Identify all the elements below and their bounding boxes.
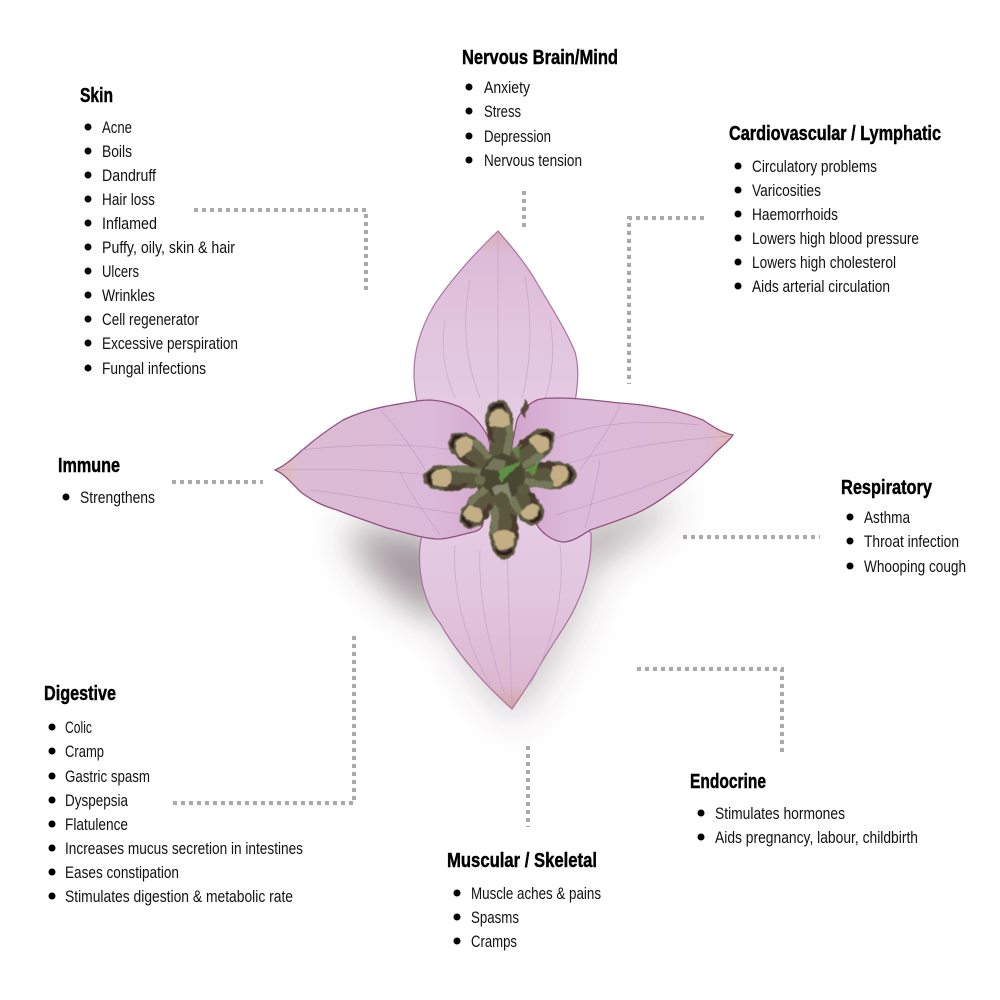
flower shadow [345,495,680,722]
heading: cardiovascular: Cardiovascular / Lymphatic [729,123,941,145]
list: respiratory [846,509,966,576]
flower centre stamens [422,399,577,560]
list: skin [84,119,238,378]
panel: nervous [462,47,618,170]
list: muscular: Cramps [471,933,517,951]
connector: cardiovascular [629,218,704,384]
connector: immune [172,480,263,484]
list: digestive: Dyspepsia [65,792,129,810]
list: cardiovascular: Circulatory problems [752,158,877,176]
list: skin: Dandruff [102,167,156,185]
list: nervous: Stress [484,103,521,121]
connector: endocrine [637,669,782,752]
list: endocrine: Stimulates hormones [715,805,845,823]
list: cardiovascular: Aids arterial circulation [752,278,890,296]
heading: nervous: Nervous Brain/Mind [462,47,618,69]
bottom petal [419,470,591,709]
list: digestive: Increases mucus secretion in intestines [65,840,303,858]
list: skin: Boils [102,143,132,161]
list: endocrine: Aids pregnancy, labour, childbirth [715,829,918,847]
list: respiratory: Asthma [864,509,911,527]
list: immune: Strengthens [80,489,155,507]
list: nervous [466,79,582,170]
heading: skin: Skin [80,85,113,107]
list: skin: Wrinkles [102,287,155,305]
panel: muscular [447,850,601,951]
flower illustration [275,231,733,722]
list: digestive: Gastric spasm [65,768,150,786]
connector: skin [194,210,366,293]
top petal [414,231,578,470]
panel: skin [80,85,238,378]
panel: endocrine [690,771,918,847]
list: cardiovascular: Lowers high blood pressure [752,230,919,248]
list: endocrine [698,805,918,847]
list: digestive: Eases constipation [65,864,179,882]
list: muscular [454,885,601,951]
list: digestive: Flatulence [65,816,128,834]
list: nervous: Nervous tension [484,152,582,170]
list: skin: Puffy, oily, skin & hair [102,239,235,257]
list: muscular: Spasms [471,909,519,927]
list: cardiovascular: Haemorrhoids [752,206,838,224]
connector: respiratory [683,535,820,539]
list: digestive: Cramp [65,743,104,761]
list: cardiovascular [734,158,919,296]
connector: digestive [173,634,354,803]
panel: cardiovascular [729,123,941,296]
heading: digestive: Digestive [44,683,116,705]
list: skin: Hair loss [102,191,155,209]
heading: respiratory: Respiratory [841,477,933,499]
list: skin: Cell regenerator [102,311,199,329]
list: respiratory: Whooping cough [864,558,966,576]
list: skin: Inflamed [102,215,157,233]
list: skin: Excessive perspiration [102,335,238,353]
list: digestive: Stimulates digestion & metabolic rate [65,888,293,906]
panel: immune [58,455,155,507]
list: cardiovascular: Varicosities [752,182,821,200]
list: nervous: Anxiety [484,79,531,97]
list: cardiovascular: Lowers high cholesterol [752,254,896,272]
panel: respiratory [841,477,966,576]
list: digestive: Colic [65,719,92,737]
list: skin: Acne [102,119,132,137]
heading: endocrine: Endocrine [690,771,766,793]
list: nervous: Depression [484,128,551,146]
left petal [275,400,500,539]
list: skin: Ulcers [102,263,139,281]
heading: immune: Immune [58,455,120,477]
list: digestive [48,719,303,906]
list: muscular: Muscle aches & pains [471,885,601,903]
connector: nervous [522,191,526,227]
connector: muscular [526,746,530,827]
panel: digestive [44,683,303,906]
list: respiratory: Throat infection [864,533,959,551]
heading: muscular: Muscular / Skeletal [447,850,597,872]
list: skin: Fungal infections [102,360,206,378]
right petal [505,398,733,542]
